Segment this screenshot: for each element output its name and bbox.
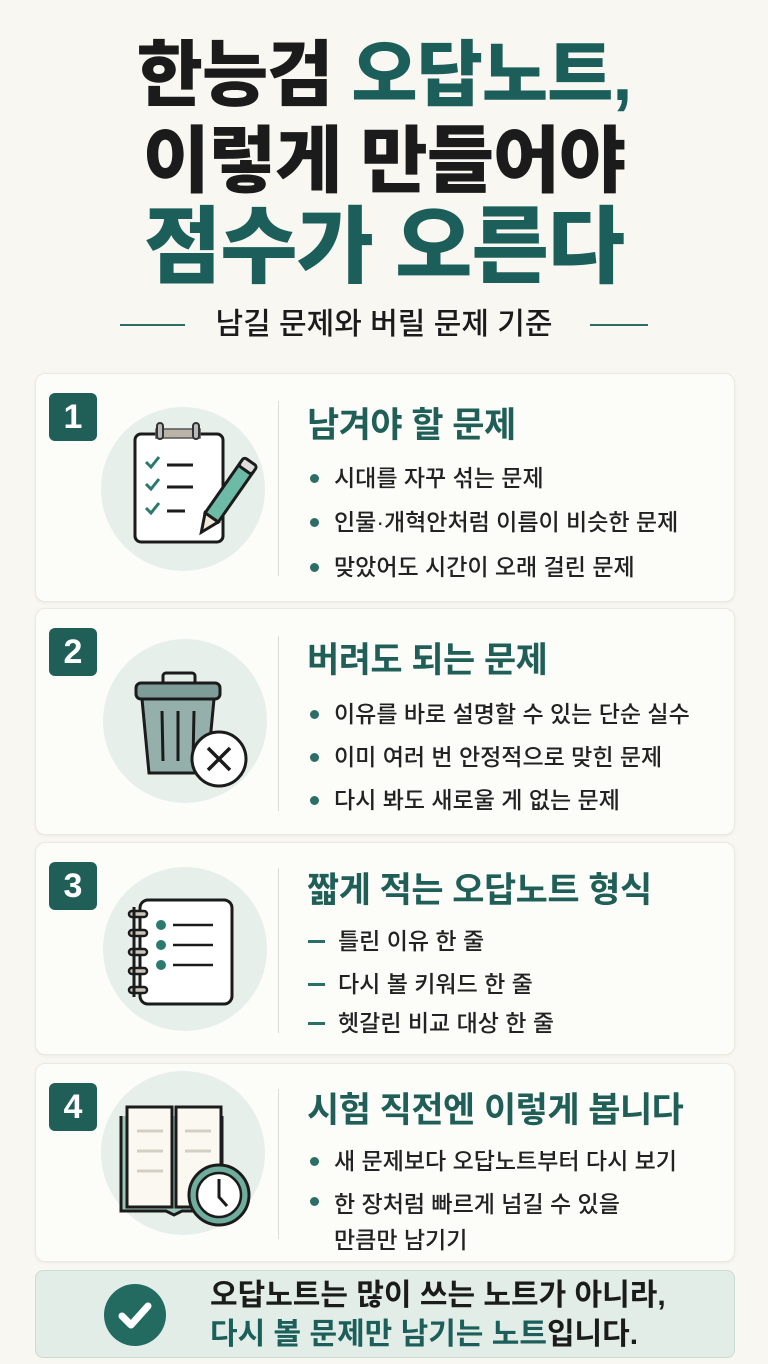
heading 4: 시험 직전엔 이렇게 봅니다 bbox=[307, 1091, 683, 1130]
list 3 bbox=[308, 928, 554, 1036]
icon: notebook bbox=[103, 867, 267, 1031]
list 1: 시대를 자꾸 섞는 문제 bbox=[334, 465, 544, 491]
title: 점수가 오른다 bbox=[144, 200, 624, 294]
list 4: 새 문제보다 오답노트부터 다시 보기 bbox=[334, 1148, 677, 1174]
list 4 bbox=[310, 1148, 677, 1253]
callout text bbox=[210, 1279, 666, 1351]
badge 1: 1 bbox=[64, 398, 82, 436]
icon: book and clock bbox=[101, 1071, 265, 1235]
badge 2: 2 bbox=[64, 633, 82, 671]
title: 한능검 오답노트, bbox=[137, 36, 631, 116]
panel 1 bbox=[35, 373, 735, 602]
badge 4: 4 bbox=[64, 1088, 82, 1126]
list 1: 맞았어도 시간이 오래 걸린 문제 bbox=[334, 554, 635, 580]
list 1: 인물·개혁안처럼 이름이 비슷한 문제 bbox=[334, 509, 678, 535]
panel 4 bbox=[35, 1063, 735, 1262]
title bbox=[137, 36, 631, 294]
list 2 bbox=[310, 701, 690, 813]
list 3: 헷갈린 비교 대상 한 줄 bbox=[338, 1010, 554, 1036]
icon: trash can bbox=[103, 639, 267, 803]
subtitle: 남길 문제와 버릴 문제 기준 bbox=[216, 308, 552, 341]
list 4: 한 장처럼 빠르게 넘길 수 있을 bbox=[334, 1191, 620, 1217]
badge 3: 3 bbox=[64, 867, 82, 905]
list 3: 틀린 이유 한 줄 bbox=[338, 928, 484, 954]
badge 3 bbox=[49, 862, 97, 910]
panel 2 bbox=[35, 608, 735, 835]
callout text: 다시 볼 문제만 남기는 노트입니다. bbox=[210, 1318, 638, 1351]
callout text: 오답노트는 많이 쓰는 노트가 아니라, bbox=[210, 1279, 666, 1312]
list 3: 다시 볼 키워드 한 줄 bbox=[338, 971, 533, 997]
list 2: 이유를 바로 설명할 수 있는 단순 실수 bbox=[334, 701, 690, 727]
icon: check circle bbox=[104, 1284, 166, 1346]
badge 4 bbox=[49, 1083, 97, 1131]
list 2: 다시 봐도 새로울 게 없는 문제 bbox=[334, 787, 620, 813]
icon: clipboard bbox=[101, 407, 265, 571]
callout banner bbox=[35, 1270, 735, 1358]
list 4: 만큼만 남기기 bbox=[334, 1227, 467, 1253]
list 1 bbox=[310, 465, 678, 580]
list 2: 이미 여러 번 안정적으로 맞힌 문제 bbox=[334, 744, 662, 770]
heading 2: 버려도 되는 문제 bbox=[307, 641, 547, 680]
panel 3 bbox=[35, 842, 735, 1055]
heading 1: 남겨야 할 문제 bbox=[307, 406, 516, 445]
badge 1 bbox=[49, 393, 97, 441]
badge 2 bbox=[49, 628, 97, 676]
heading 3: 짧게 적는 오답노트 형식 bbox=[307, 871, 652, 910]
title: 이렇게 만들어야 bbox=[143, 121, 625, 202]
